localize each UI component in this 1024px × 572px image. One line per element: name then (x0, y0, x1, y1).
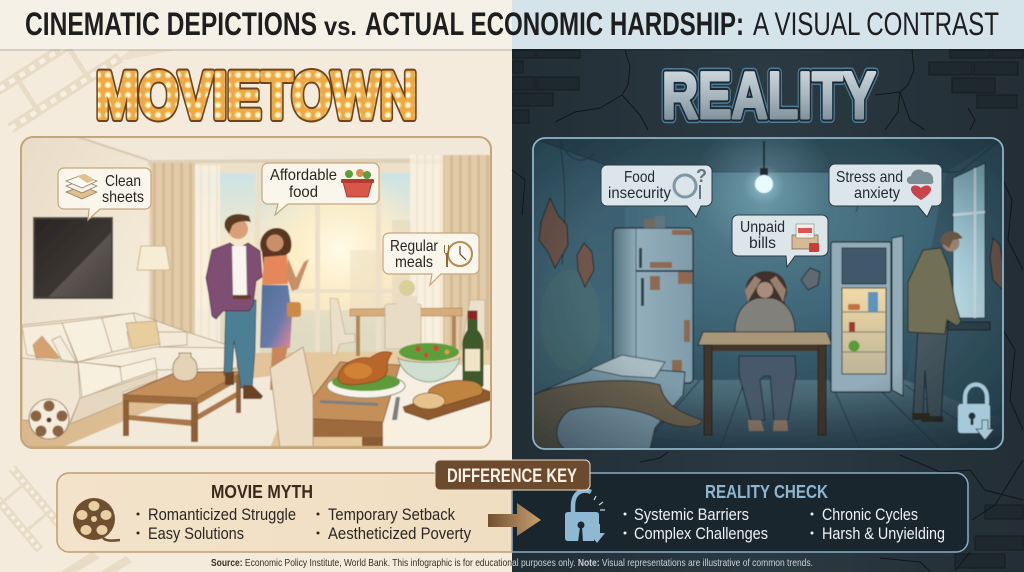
arrow: myth to reality (488, 503, 541, 536)
callout: Regular meals: meals (395, 254, 433, 271)
bread board (403, 380, 491, 420)
left background panel: Movietown (0, 20, 512, 572)
man at window (908, 231, 963, 422)
wall damage holes (539, 198, 1003, 290)
title bar (0, 0, 1024, 51)
callout: Affordable food: food (289, 184, 318, 201)
reality list (624, 505, 945, 543)
callout: Food insecurity: insecurity (608, 185, 671, 202)
couple: woman (260, 228, 309, 390)
callout: Unpaid bills (732, 215, 828, 267)
myth list: Temporary Setback (328, 505, 455, 524)
icon: grocery basket (341, 169, 374, 197)
callout: Unpaid bills: Unpaid (740, 219, 785, 236)
myth list: Aestheticized Poverty (328, 524, 471, 543)
heading: REALITY steel lettering: REALITY (662, 58, 876, 132)
heading: movie myth: MOVIE MYTH (211, 481, 313, 502)
icon: film reel (73, 498, 120, 541)
myth list: Romanticized Struggle (148, 505, 296, 524)
heading: REALITY steel lettering: REALITY (662, 58, 876, 132)
icon: empty plate with question mark: ? (696, 166, 707, 186)
myth list: Easy Solutions (148, 524, 244, 543)
reality list: Systemic Barriers (634, 505, 749, 524)
title text: ACTUAL ECONOMIC HARDSHIP: (365, 6, 744, 42)
panel: reality check key (512, 473, 968, 552)
icon: storm cloud and broken heart (907, 169, 933, 200)
rug (65, 376, 278, 447)
callout: Food insecurity (601, 165, 712, 217)
callout: Stress and anxiety: Stress and (836, 169, 903, 186)
panel: reality basement scene (533, 115, 1003, 449)
callout: Clean sheets: Clean (105, 173, 141, 190)
floor lamp (137, 246, 170, 270)
icon: red stamped envelope (792, 224, 819, 252)
callout: Regular meals: Regular (390, 238, 439, 255)
panel: movie myth key (57, 473, 512, 552)
window with sunset view (195, 155, 444, 360)
icon: clock plate and fork (444, 242, 472, 267)
roast turkey platter (327, 352, 405, 398)
icon: padlock with arrow (958, 384, 994, 440)
callout: Unpaid bills: bills (749, 235, 776, 252)
rusty refrigerator (613, 216, 693, 383)
icon: stacked sheets (66, 174, 97, 199)
callout: Food insecurity: Food (624, 169, 655, 186)
light bulb (755, 141, 773, 193)
heading: REALITY steel lettering: REALITY (662, 58, 876, 132)
wine bottle (463, 311, 483, 386)
salad bowl (398, 343, 460, 382)
sofa (22, 313, 237, 424)
callout: Affordable food: Affordable (270, 167, 337, 184)
callout: Clean sheets: sheets (102, 189, 144, 206)
source note: Source: Economic Policy Institute, World Bank. This infographic is for educational purposes only. Note: Visual representations are illustrative of common trends. (211, 557, 813, 569)
barred window with light (948, 163, 990, 330)
heading: MOVIETOWN marquee: MOVIETOWN (96, 58, 417, 132)
reality list: Complex Challenges (634, 524, 768, 543)
coffee table with vase (123, 353, 242, 442)
callout: Affordable food (262, 163, 379, 215)
right background panel: Reality wall (512, 49, 1024, 572)
heading: MOVIETOWN marquee: MOVIETOWN (96, 58, 417, 132)
open refrigerator (831, 236, 903, 396)
foreground dining table (270, 347, 491, 449)
icon: film reel badge (29, 399, 69, 439)
table and seated woman (698, 271, 832, 435)
couple: man (206, 214, 263, 399)
callout: Stress and anxiety (829, 164, 942, 217)
panel: movietown apartment scene (21, 137, 491, 449)
knife and fork (320, 397, 400, 420)
reality list: Harsh & Unyielding (822, 524, 945, 543)
callout: Stress and anxiety: anxiety (854, 185, 900, 202)
mattress with blanket (533, 355, 702, 449)
title text: CINEMATIC DEPICTIONS (25, 6, 317, 42)
television (34, 218, 112, 298)
icon: broken padlock with arrow (565, 491, 605, 543)
badge: difference key (435, 460, 590, 490)
callout: Clean sheets (58, 168, 151, 220)
heading: reality check: REALITY CHECK (705, 481, 829, 502)
badge: difference key: DIFFERENCE KEY (447, 466, 577, 487)
reality list: Chronic Cycles (822, 505, 918, 524)
background dining set (330, 280, 485, 356)
title text: vs. (324, 11, 357, 41)
callout: Regular meals (383, 233, 479, 285)
myth list (136, 505, 471, 543)
